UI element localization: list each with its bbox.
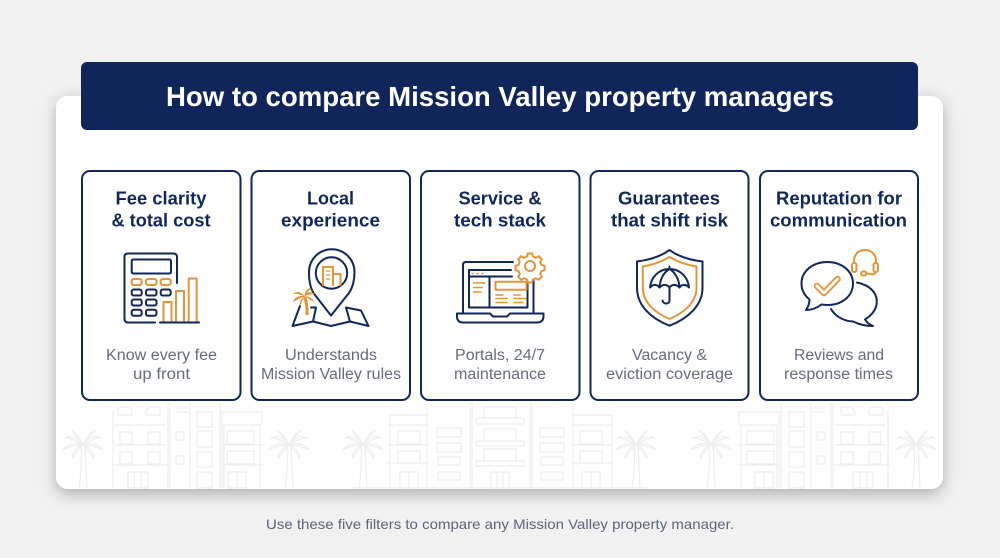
- panel: reputation: [760, 171, 918, 400]
- text: reputation description: [784, 347, 893, 383]
- caption: Use these five filters to compare any Mission Valley property manager.: [266, 516, 734, 532]
- heading: guarantees: Guarantees: [618, 188, 720, 208]
- heading: fee clarity: & total cost: [112, 210, 210, 230]
- heading: reputation: communication: [770, 210, 907, 230]
- panel: local experience: [252, 171, 410, 400]
- icon: map pin with palm: [292, 249, 368, 326]
- text: guarantees description: [606, 347, 733, 383]
- text: reputation description: response times: [784, 366, 893, 383]
- heading: fee clarity: Fee clarity: [116, 188, 207, 208]
- heading: fee clarity: [112, 188, 210, 230]
- text: service description: Portals, 24/7: [455, 347, 545, 364]
- text: service description: maintenance: [454, 366, 546, 383]
- heading: guarantees: that shift risk: [611, 210, 729, 230]
- panel: service and tech stack: [421, 171, 580, 400]
- panel: guarantees: [590, 171, 748, 400]
- heading: reputation: [770, 188, 907, 230]
- icon: calculator and bars: [124, 254, 199, 322]
- heading: guarantees: [611, 188, 729, 230]
- text: guarantees description: eviction coverage: [606, 366, 733, 383]
- panel: fee clarity: [82, 171, 240, 400]
- icon: laptop with gear: [457, 254, 544, 322]
- icon: chat bubbles and headset: [802, 250, 878, 326]
- text: fee clarity description: [106, 347, 217, 383]
- icon: shield with umbrella: [637, 250, 702, 326]
- text: reputation description: Reviews and: [794, 347, 884, 364]
- text: fee clarity description: Know every fee: [106, 347, 217, 364]
- heading: local experience: [281, 188, 380, 230]
- text: local experience description: Mission Valley rules: [261, 366, 401, 383]
- heading: reputation: Reputation for: [776, 188, 902, 208]
- text: guarantees description: Vacancy &: [632, 347, 708, 364]
- card panel: [56, 96, 943, 489]
- decorative skyline: [63, 403, 936, 488]
- heading: local experience: experience: [281, 210, 380, 230]
- heading: service and tech stack: [454, 188, 547, 230]
- heading: local experience: Local: [307, 188, 354, 208]
- title banner: [81, 62, 918, 130]
- title: How to compare Mission Valley property managers: [166, 81, 834, 112]
- text: local experience description: [261, 347, 401, 383]
- text: service description: [454, 347, 546, 383]
- heading: service and tech stack: tech stack: [454, 210, 547, 230]
- text: fee clarity description: up front: [133, 366, 191, 383]
- heading: service and tech stack: Service &: [458, 188, 542, 208]
- text: local experience description: Understands: [285, 347, 377, 364]
